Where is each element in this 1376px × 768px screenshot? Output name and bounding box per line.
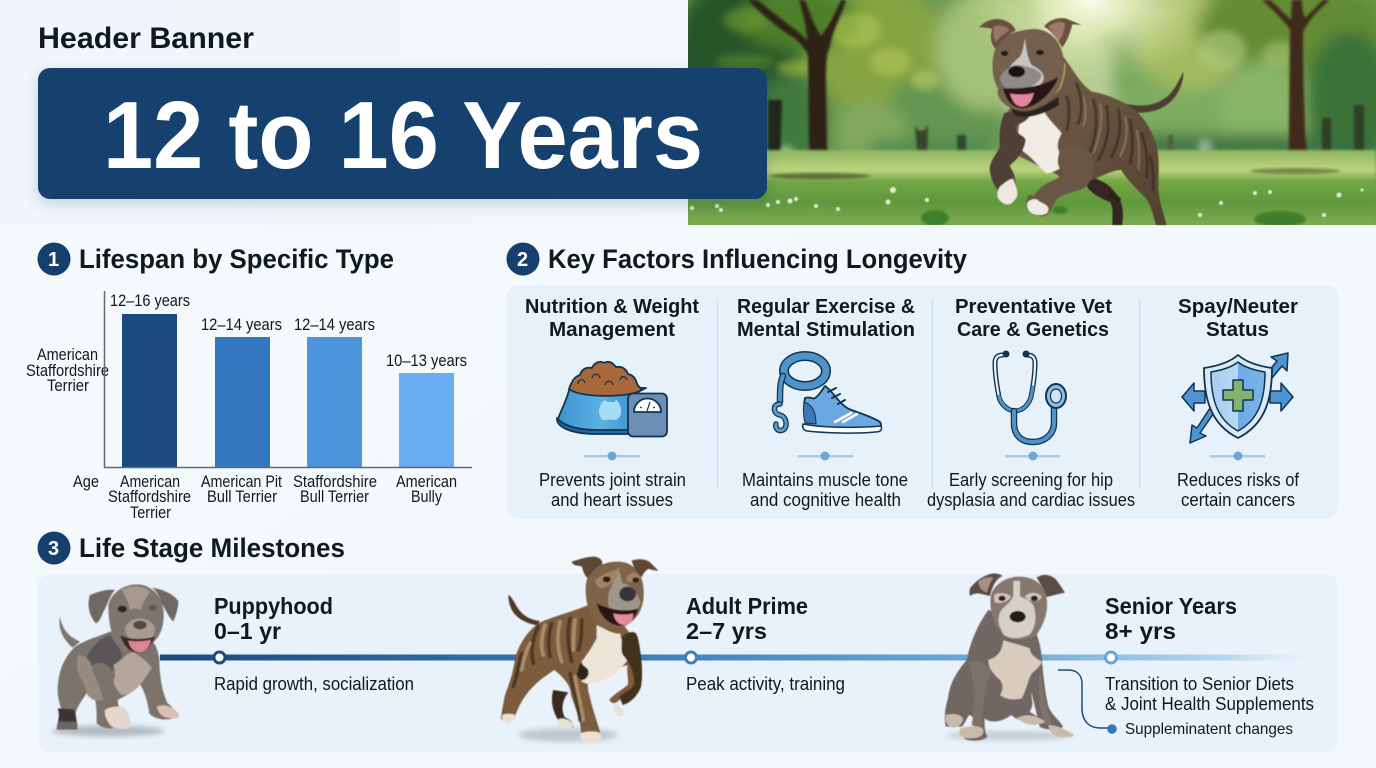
factor: nutrition: Prevents joint strain (539, 469, 686, 490)
factor: vet care: dysplasia and cardiac issues (927, 489, 1135, 510)
factor: vet care: Preventative Vet (955, 295, 1112, 318)
section heading 3: 3 (48, 538, 59, 560)
bar value labels: 10–13 years (386, 352, 467, 370)
category labels: Bull Terrier (207, 488, 277, 506)
dog in hero photo (979, 18, 1183, 225)
y axis label: Age (73, 473, 99, 491)
factor: exercise (737, 295, 915, 510)
title banner: 12 to 16 Years (103, 82, 703, 189)
category labels: Staffordshire (293, 473, 377, 491)
factor: vet care: Care & Genetics (957, 318, 1109, 341)
stage: adult text (686, 593, 845, 694)
icon: stethoscope (995, 350, 1066, 442)
slider mark (1005, 452, 1060, 460)
factor: spay neuter: Status (1206, 318, 1269, 341)
slider mark (1210, 452, 1265, 460)
bar value labels (110, 292, 467, 370)
icon: leash and sneaker (774, 356, 882, 433)
timeline nodes (214, 652, 1116, 663)
factor: exercise: Mental Stimulation (737, 318, 915, 341)
meadow flowers (690, 187, 1364, 217)
connector callout: Suppleminatent changes (1125, 721, 1293, 738)
dog: senior (945, 573, 1074, 741)
header label: Header Banner (38, 22, 254, 55)
category labels: Bull Terrier (300, 488, 369, 506)
factor: spay neuter (1177, 295, 1300, 510)
slider mark (798, 452, 853, 460)
factor: spay neuter: certain cancers (1181, 489, 1295, 510)
dog: puppy (52, 584, 179, 736)
stage: senior text: Senior Years (1105, 593, 1237, 619)
panel: key factors (507, 285, 1338, 519)
section heading 1: Lifespan by Specific Type (79, 244, 394, 274)
factor: exercise: and cognitive health (750, 489, 901, 510)
stage: senior text: & Joint Health Supplements (1105, 693, 1314, 714)
section heading 3: Life Stage Milestones (79, 533, 345, 563)
factor: vet care: Early screening for hip (949, 469, 1113, 490)
stage: puppyhood text (214, 593, 414, 694)
header background band (0, 0, 688, 225)
factor: nutrition: Nutrition & Weight (525, 295, 699, 318)
slider mark (584, 452, 640, 460)
category labels: American Pit (201, 473, 282, 491)
stage: senior text: 8+ yrs (1105, 618, 1176, 644)
dog: adult (501, 557, 658, 742)
section heading 2: 2 (517, 249, 528, 271)
factor: spay neuter: Spay/Neuter (1178, 295, 1298, 318)
bar value labels: 12–14 years (201, 316, 282, 334)
factor: nutrition: and heart issues (551, 489, 673, 510)
stage: adult text: Adult Prime (686, 593, 808, 619)
stage: puppyhood text: 0–1 yr (214, 618, 281, 644)
stage: puppyhood text: Puppyhood (214, 593, 333, 619)
hero photo: dog running in park (670, 0, 1376, 227)
panel: life stage timeline (38, 557, 1338, 752)
factor: exercise: Maintains muscle tone (742, 469, 908, 490)
stage: senior text: Transition to Senior Diets (1105, 673, 1294, 694)
bar value labels: 12–14 years (294, 316, 375, 334)
bars (122, 314, 454, 467)
y axis label: American (37, 346, 98, 364)
stage: senior text (1105, 593, 1314, 714)
section heading 2: Key Factors Influencing Longevity (548, 244, 967, 274)
factor: spay neuter: Reduces risks of (1177, 469, 1300, 490)
category labels: Staffordshire (108, 488, 191, 506)
category labels (108, 473, 457, 522)
section heading 1: 1 (48, 249, 59, 271)
category labels: American (396, 473, 457, 491)
stage: puppyhood text: Rapid growth, socialization (214, 673, 414, 694)
category labels: Bully (411, 488, 443, 506)
factor: nutrition (525, 295, 699, 510)
stage: adult text: 2–7 yrs (686, 618, 767, 644)
category labels: American (120, 473, 180, 491)
factor: nutrition: Management (549, 318, 675, 341)
category labels: Terrier (130, 504, 171, 522)
bar value labels: 12–16 years (110, 292, 190, 310)
connector callout (1058, 670, 1293, 738)
icon: shield with arrows (1182, 353, 1293, 443)
stage: adult text: Peak activity, training (686, 673, 845, 694)
y axis label: Terrier (47, 377, 89, 395)
bar chart: lifespan by type (26, 291, 472, 522)
icon: food bowl and scale (557, 362, 667, 436)
y axis label (26, 346, 109, 491)
y axis label: Staffordshire (26, 362, 109, 380)
factor: vet care (927, 295, 1135, 510)
factor: exercise: Regular Exercise & (737, 295, 915, 318)
timeline bar (160, 654, 1322, 660)
